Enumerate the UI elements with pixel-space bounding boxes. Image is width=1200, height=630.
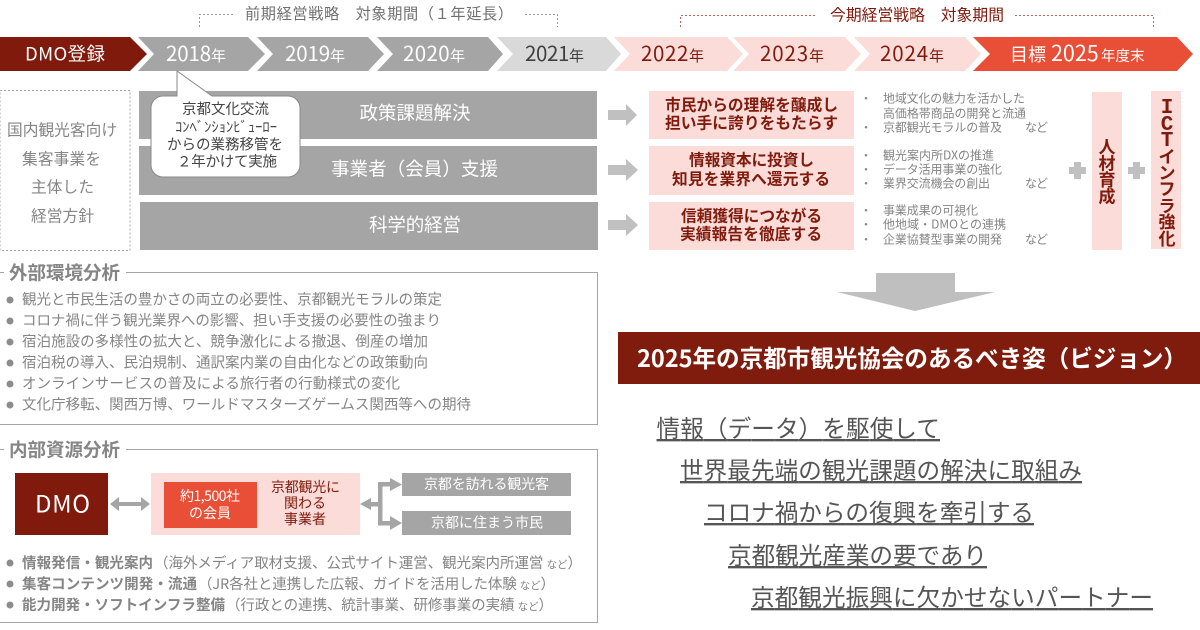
list 2: 業界交流機会の創出 [883,174,990,192]
list 3: ・ [860,230,872,248]
target 2025 [973,37,1193,71]
list 2: など [1025,174,1048,192]
goal 2: 情報資本に投資し [689,148,814,170]
left policy box [0,90,130,250]
vertical box: ICT infrastructure: ン [1158,159,1176,184]
bracket: current strategy period: 今期経営戦略 対象期間 [830,2,1004,26]
bullet list: 宿泊施設の多様性の拡大と、競争激化による撤退、倒産の増加 [22,330,428,352]
left policy box: 国内観光客向け [7,118,117,140]
vertical box: ICT infrastructure: 化 [1158,225,1176,250]
bullet list: 宿泊税の導入、民泊規制、通訳案内業の自由化などの政策動向 [22,352,428,372]
heading: 内部資源分析 [9,436,120,462]
list 2: ・ [860,174,872,192]
2022: 2022年 [641,37,704,67]
vision statement: 京都観光振興に欠かせないパートナー [751,579,1153,613]
DMO box [15,473,108,535]
goal 1 [649,91,854,139]
left policy box: 主体した [31,174,94,198]
list 1: 高価格帯商品の開発と流通 [883,104,1026,122]
bracket: previous strategy period [200,2,558,27]
callout [151,71,300,177]
activities list: （行政との連携、統計事業、研修事業の実績 など） [226,594,553,615]
bullet list: 観光と市民生活の豊かさの両立の必要性、京都観光モラルの策定 [22,288,442,310]
list 2: ・ [860,146,872,164]
visitors box [402,473,571,496]
vertical box: human resources [1092,92,1122,250]
vertical box: ICT infrastructure: 強 [1158,208,1176,233]
detail lists [860,90,1048,248]
left policy box: 集客事業を [22,146,101,170]
vertical box: ICT infrastructure: I [1161,97,1173,120]
members box: の会員 [189,503,231,523]
bar: scientific management: 科学的経営 [369,212,461,238]
list 2: 観光案内所DXの推進 [883,146,994,164]
bracket: current strategy period [680,2,1154,27]
activities list: 情報発信・観光案内 [22,552,153,573]
goal 2 [649,146,854,195]
callout: 京都文化交流 [182,98,270,119]
vertical box: ICT infrastructure: イ [1158,143,1176,168]
members box: 事業者 [284,509,326,529]
members box: 約1,500社 [180,486,240,506]
policy bars [139,91,598,250]
heading: 外部環境分析 [9,260,120,286]
2019: 2019年 [285,37,345,67]
list 3: 事業成果の可視化 [883,202,978,218]
goal 2: 知見を業界へ還元する [672,166,830,190]
activities list: （JR各社と連携した広報、ガイドを活用した体験 など） [198,573,555,594]
list 2: データ活用事業の強化 [883,160,1002,178]
callout: からの業務移管を [167,134,283,154]
2022 [614,37,743,71]
list 1 [860,90,1048,136]
bracket: previous strategy period: 前期経営戦略 対象期間（１年延長） [245,2,513,24]
list 1: 地域文化の魅力を活かした [883,90,1025,106]
target 2025: 目標 [1010,41,1046,67]
branch arrow [360,478,402,530]
plus icon 2 [1128,162,1145,179]
list 3: ・ [860,216,872,232]
citizens box: 京都に住まう市民 [431,512,543,532]
plus icon 1 [1069,162,1086,179]
list 2 [860,146,1048,192]
2020: 2020年 [403,37,465,67]
timeline chevrons [0,37,1193,71]
2023 [733,37,861,71]
goal 1: 担い手に誇りをもたらす [665,110,838,134]
target 2025: 年度末 [1101,45,1145,66]
activities list: （海外メディア取材支援、公式サイト運営、観光案内所運営 など） [154,552,582,573]
vertical box: human resources: 材 [1098,150,1116,174]
vertical box: ICT infrastructure: T [1161,130,1173,153]
goal 3: 信頼獲得につながる [681,204,822,226]
2021: 2021年 [525,37,584,67]
bullet list: 文化庁移転、関西万博、ワールドマスターズゲームス関西等への期待 [22,394,471,414]
goal 3: 実績報告を徹底する [680,222,822,244]
vision statement: コロナ禍からの復興を牽引する [704,494,1034,528]
list 1: ・ [860,90,872,106]
arrow 1 [608,104,637,126]
vertical box: ICT infrastructure: ラ [1158,192,1176,217]
list 3: 企業協賛型事業の開発 [883,230,1002,248]
vertical box: human resources: 人 [1098,133,1116,158]
bar: member support [139,146,597,195]
goal boxes [649,91,854,250]
list 3: ・ [860,202,872,218]
list 3: 他地域・DMOとの連携 [883,216,1006,232]
activities list: 能力開発・ソフトインフラ整備 [22,594,226,615]
goal 3 [649,202,854,250]
2018: 2018年 [166,37,226,67]
flow arrows [608,104,638,236]
vertical box: human resources: 育 [1098,166,1116,191]
vision banner: 2025年の京都市観光協会のあるべき姿（ビジョン） [637,340,1187,374]
2018 [138,37,265,71]
arrow 2 [608,159,638,181]
callout: ｺﾝﾍﾞﾝｼｮﾝﾋﾞｭｰﾛｰ [175,117,277,137]
list 3: など [1025,230,1048,248]
members box: 関わる [284,493,326,513]
2019 [257,37,384,71]
vision statement: 情報（データ）を駆使して [656,410,940,444]
panel: internal resources analysis [0,436,598,622]
vertical box: ICT infrastructure: フ [1158,175,1176,200]
vision statement: 世界最先端の観光課題の解決に取組み [680,452,1082,486]
members box [151,473,360,535]
bar: policy issues [139,91,597,139]
vertical box: ICT infrastructure: C [1161,114,1174,137]
list 1: ・ [860,118,872,136]
activities list: 集客コンテンツ開発・流通 [22,573,198,594]
vision banner [618,332,1200,384]
big down arrow [837,273,995,311]
arrow 3 [608,214,638,236]
citizens box [402,511,571,535]
callout: ２年かけて実施 [177,150,277,172]
2020 [377,37,503,71]
double arrow [110,497,150,511]
target 2025: 2025 [1051,37,1099,68]
list 1: 京都観光モラルの普及 [883,118,1002,136]
list 3 [860,202,1048,248]
list 1: など [1025,118,1048,136]
DMO box: DMO [35,484,90,520]
2021 [497,37,621,71]
bar: member support: 事業者（会員）支援 [331,156,498,182]
vertical box: ICT infrastructure [1151,91,1181,250]
visitors box: 京都を訪れる観光客 [424,474,549,494]
bullet list [6,288,471,414]
members box: 京都観光に [271,477,340,497]
vision statement [656,410,1153,613]
panel: external environment analysis [0,260,598,424]
DMO registration: DMO登録 [25,40,105,66]
bar: policy issues: 政策課題解決 [360,100,470,126]
bar: scientific management [140,202,598,250]
list 2: ・ [860,160,872,178]
vision statement: 京都観光産業の要であり [728,537,987,571]
left policy box: 経営方針 [31,204,94,226]
2023: 2023年 [760,37,824,67]
2024: 2024年 [880,37,944,67]
bullet list: コロナ禍に伴う観光業界への影響、担い手支援の必要性の強まり [22,310,441,330]
DMO registration [0,37,147,71]
vertical box: human resources: 成 [1098,182,1116,208]
goal 1: 市民からの理解を醸成し [665,92,838,116]
activities list [6,552,582,615]
2024 [854,37,981,71]
bullet list: オンラインサービスの普及による旅行者の行動様式の変化 [22,372,400,394]
